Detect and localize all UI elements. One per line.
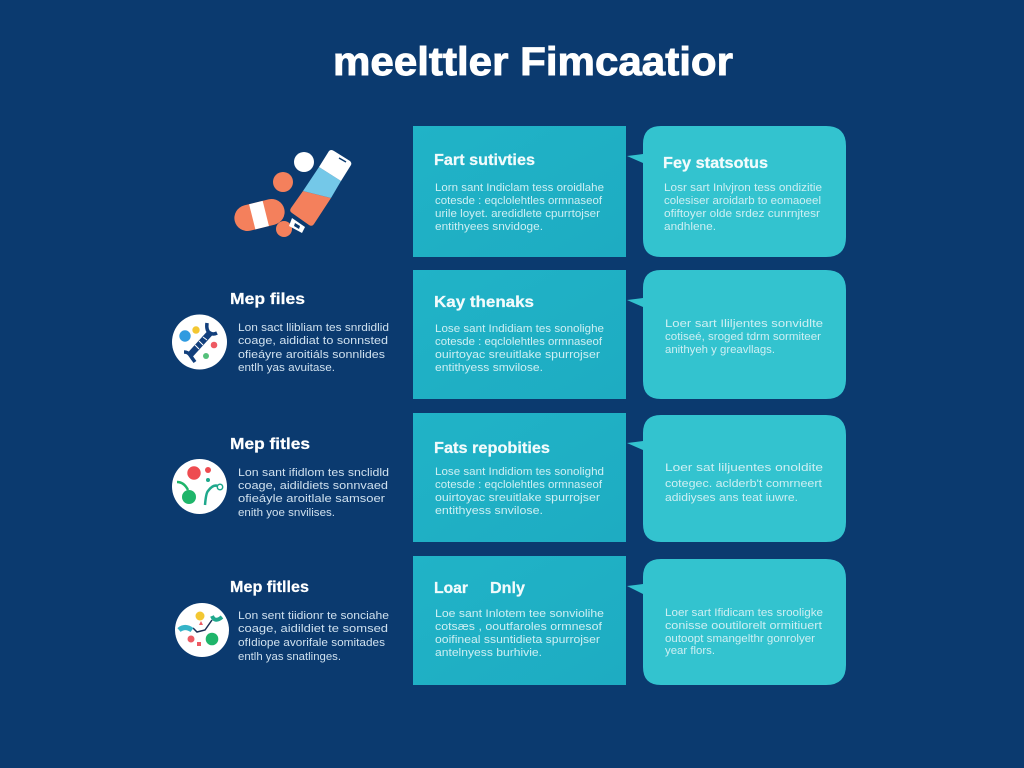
text block: entithyees snvidoge. <box>435 221 543 233</box>
left item: Mep fitles second <box>175 579 389 663</box>
text block: ofIdiope avorifale somitades <box>238 637 386 649</box>
text block: ofieáyre aroitiáls sonnlides <box>238 349 386 361</box>
callout: row 4 <box>627 559 846 685</box>
panel: Fats repobities <box>413 413 626 542</box>
text block: ofieáyle aroitlale samsoer <box>238 493 385 505</box>
text block: ouirtoyac sreuitlake spurrojser <box>435 349 600 361</box>
text block <box>435 608 604 659</box>
text block: Lon sact llibliam tes snrdidlid <box>238 322 389 334</box>
text block: adidiyses ans teat iuwre. <box>665 492 798 504</box>
text block: andhlene. <box>664 221 716 233</box>
text block: entlh yas avuitase. <box>238 362 335 374</box>
text block: cotesde : eqclolehtles ormnaseof <box>435 336 603 348</box>
callout: Fey statsotus <box>627 126 846 257</box>
heading: Fey statsotus <box>663 155 768 172</box>
text block: Lon sant ifidlom tes snclidld <box>238 467 389 479</box>
icon: medicine pills and tube <box>232 150 351 237</box>
text block: entithyess smvilose. <box>435 362 543 374</box>
text block <box>665 318 823 356</box>
text block <box>435 466 604 517</box>
text block <box>435 182 604 233</box>
text block <box>435 323 604 374</box>
heading: Kay thenaks <box>434 294 534 311</box>
text block: ofiftoyer olde srdez cunrnjtesr <box>664 208 820 220</box>
heading: Fats repobities <box>434 440 550 457</box>
icon: connected molecules <box>175 603 229 657</box>
heading: Fart sutivties <box>434 152 535 169</box>
text block: urile loyet. aredidlete cpurrtojser <box>435 208 600 220</box>
text block: Loer sat liljuentes onoldite <box>665 462 823 474</box>
panel: Fart sutivties <box>413 126 626 257</box>
text block: antelnyess burhivie. <box>435 647 542 659</box>
text block: year flors. <box>665 645 715 657</box>
text block <box>238 610 389 663</box>
heading: Mep fitlles <box>230 579 309 596</box>
text block: cotegec. aclderb't comrneert <box>665 478 822 490</box>
text block: cotesde : eqclolehtles ormnaseof <box>435 195 603 207</box>
text block: cotiseé, sroged tdrm sormiteer <box>665 331 821 343</box>
left item: Mep fitles <box>172 436 389 519</box>
text block: Loer sart Ililjentes sonvidlte <box>665 318 823 330</box>
text block: anithyeh y greavllags. <box>665 344 775 356</box>
heading second word: Dnly <box>490 580 525 597</box>
text block: Losr sart Inlvjron tess ondizitie <box>664 182 822 194</box>
text block <box>238 467 389 519</box>
text block: outoopt smangelthr gonrolyer <box>665 633 815 645</box>
text block: Loe sant Inlotem tee sonviolihe <box>435 608 604 620</box>
heading: Mep files <box>230 291 305 308</box>
callout: row 2 <box>627 270 846 399</box>
title: meelttler Fimcaatior <box>333 40 733 84</box>
text block: Lose sant Indidiom tes sonolighd <box>435 466 604 478</box>
text block <box>664 182 822 233</box>
text block <box>665 607 823 657</box>
text block: Lose sant Indidiam tes sonolighe <box>435 323 604 335</box>
text block <box>665 462 823 504</box>
text block: conisse ooutilorelt ormitiuert <box>665 620 822 632</box>
text block: coage, aidildiet te somsed <box>238 623 388 635</box>
text block: entithyess snvilose. <box>435 505 543 517</box>
text block: coage, aidildiets sonnvaed <box>238 480 388 492</box>
text block: Lon sent tiidionr te sonciahe <box>238 610 389 622</box>
icon: red and green molecules <box>172 459 227 514</box>
text block: entlh yas snatlinges. <box>238 651 341 663</box>
callout: row 3 <box>627 415 846 542</box>
text block: enith yoe snvilises. <box>238 507 335 519</box>
left item: Mep files <box>172 291 389 374</box>
text block: coage, aididiat to sonnsted <box>238 335 388 347</box>
heading: Mep fitles <box>230 436 310 453</box>
text block: cotesde : eqclolehtles ormnaseof <box>435 479 603 491</box>
text block: ooifineal ssuntidieta spurrojser <box>435 634 600 646</box>
text block: ouirtoyac sreuitlake spurrojser <box>435 492 600 504</box>
heading: Loar <box>434 580 468 597</box>
text block: cotsæs , ooutfaroles ormnesof <box>435 621 603 633</box>
text block <box>238 322 389 374</box>
panel: Loar Dnly <box>413 556 626 685</box>
text block: colesiser aroidarb to eomaoeel <box>664 195 821 207</box>
panel: Kay thenaks <box>413 270 626 399</box>
text block: Lorn sant Indiclam tess oroidlahe <box>435 182 604 194</box>
text block: Loer sart Ifidicam tes srooligke <box>665 607 823 619</box>
icon: molecule wrench <box>172 314 227 370</box>
